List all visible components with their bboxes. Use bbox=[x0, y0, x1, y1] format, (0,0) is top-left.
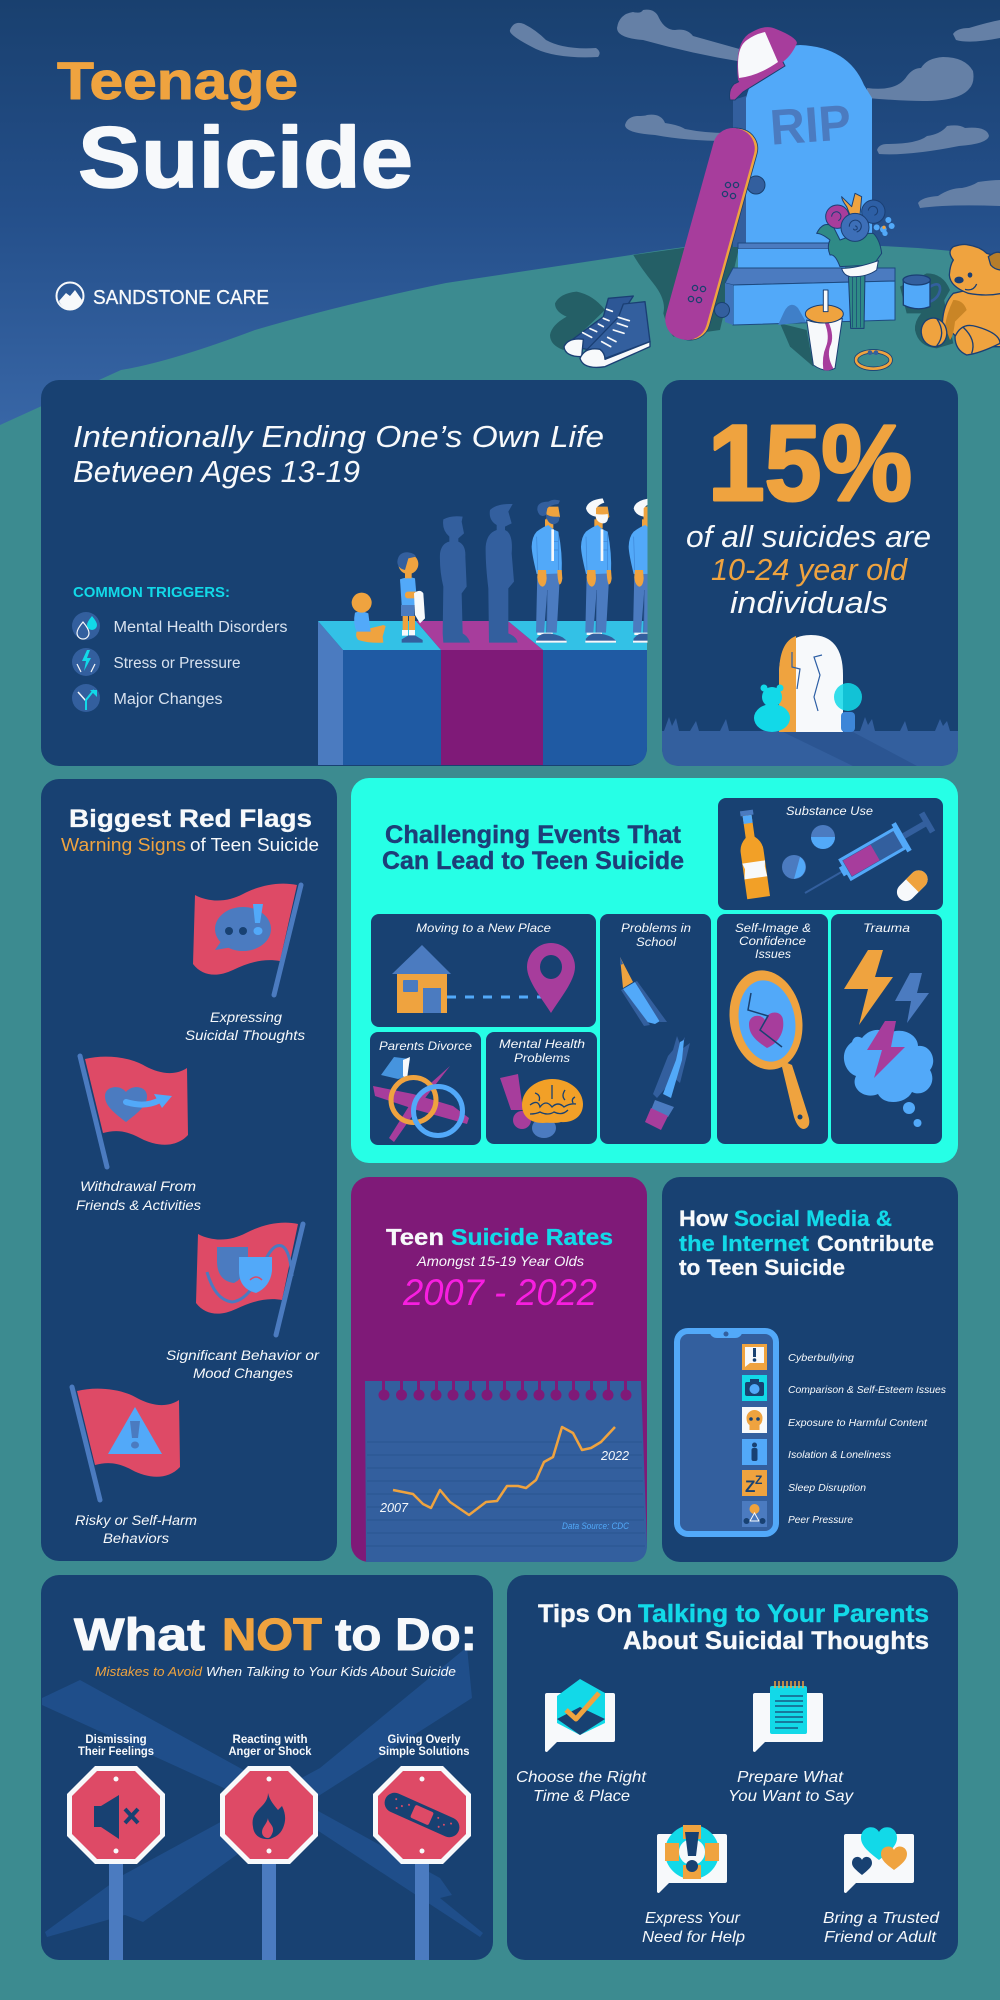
logo: Sandstone Care bbox=[56, 282, 269, 310]
figure: young adult silhouette bbox=[486, 504, 518, 643]
trigger: stress or pressure: Stress or Pressure bbox=[114, 655, 240, 672]
social item: cyberbullying bbox=[742, 1344, 854, 1370]
panel: tips for talking to parents bbox=[507, 1575, 958, 1960]
icon: syringe bbox=[797, 807, 938, 907]
social media heading: the Internet bbox=[679, 1231, 810, 1256]
social media heading: Contribute bbox=[817, 1231, 934, 1256]
social item: peer pressure: Peer Pressure bbox=[788, 1514, 853, 1526]
title bbox=[57, 52, 413, 206]
card: mental health problems: Problems bbox=[514, 1051, 570, 1065]
platform bbox=[318, 621, 647, 765]
card: self-image and confidence issues: Issues bbox=[755, 947, 791, 961]
sneakers bbox=[564, 296, 650, 367]
social item: sleep disruption: Sleep Disruption bbox=[788, 1482, 866, 1494]
panel: social media bbox=[662, 1177, 958, 1562]
social media heading: How bbox=[679, 1206, 729, 1231]
flag: withdrawal bbox=[76, 1056, 201, 1213]
icon: house bbox=[392, 945, 451, 1013]
panel: 15 percent stat bbox=[662, 380, 958, 766]
trigger: stress or pressure bbox=[72, 648, 240, 676]
panel: challenging events bbox=[351, 778, 958, 1163]
tip: bring a trusted friend bbox=[823, 1827, 940, 1946]
flag: behavior or mood changes: Significant Behavior or bbox=[166, 1347, 320, 1363]
social item: cyberbullying: Cyberbullying bbox=[788, 1352, 854, 1364]
card: problems in school: School bbox=[636, 935, 676, 949]
small grave illustration bbox=[662, 635, 958, 766]
social item: comparison bbox=[742, 1375, 947, 1401]
phone bbox=[677, 1331, 776, 1534]
trigger: mental health disorders bbox=[72, 612, 288, 640]
what not heading: What bbox=[74, 1609, 205, 1660]
sign: overly simple solutions: Giving Overly bbox=[388, 1734, 461, 1746]
clouds bbox=[510, 10, 1000, 208]
social item: peer pressure bbox=[742, 1501, 853, 1527]
icon: map pin bbox=[527, 943, 575, 1013]
social media heading: Social Media & bbox=[734, 1206, 892, 1231]
tips heading: Tips On bbox=[538, 1600, 632, 1628]
definition heading bbox=[73, 419, 604, 489]
tip: prepare what to say bbox=[728, 1681, 854, 1805]
icon: broken pencil bbox=[620, 957, 690, 1130]
stat text: individuals bbox=[730, 585, 888, 620]
mug bbox=[903, 275, 940, 309]
trigger: major changes: Major Changes bbox=[114, 691, 223, 708]
what not heading: to Do: bbox=[335, 1609, 477, 1660]
red flags heading: Biggest Red Flags bbox=[69, 805, 312, 833]
tip: express need for help: Express Your bbox=[645, 1910, 741, 1927]
stat text: 10-24 year old bbox=[711, 552, 909, 587]
what not subtitle: When Talking to Your Kids About Suicide bbox=[206, 1664, 456, 1679]
chart heading: Suicide Rates bbox=[451, 1224, 613, 1250]
notepad line chart: Data Source: CDC bbox=[562, 1521, 629, 1531]
teddy bear bbox=[918, 244, 1000, 355]
tip: bring a trusted friend: Bring a Trusted bbox=[823, 1910, 940, 1927]
social item: harmful content: Exposure to Harmful Content bbox=[788, 1417, 928, 1429]
what not heading: NOT bbox=[222, 1609, 322, 1660]
tip: bring a trusted friend: Friend or Adult bbox=[824, 1929, 937, 1946]
stat text: of all suicides are bbox=[686, 519, 931, 554]
tip: prepare what to say: Prepare What bbox=[737, 1769, 844, 1786]
illustration: memorial scene bbox=[550, 27, 1000, 371]
chart heading: Amongst 15-19 Year Olds bbox=[416, 1253, 584, 1269]
figure: baby bbox=[352, 593, 386, 643]
tip: express need for help bbox=[642, 1825, 745, 1946]
icon: bottle bbox=[735, 809, 770, 899]
big number: 15% bbox=[708, 402, 912, 523]
social item: comparison: Comparison & Self-Esteem Issues bbox=[788, 1384, 947, 1396]
ground shadows bbox=[550, 243, 953, 367]
bracelet bbox=[856, 350, 891, 369]
notepad line chart: 2022 bbox=[600, 1448, 630, 1463]
trigger: mental health disorders: Mental Health Disorders bbox=[114, 619, 288, 636]
chart heading bbox=[386, 1224, 613, 1313]
sign: reacting with anger: Reacting with bbox=[232, 1734, 308, 1746]
flag: risky or self-harm bbox=[72, 1387, 197, 1546]
card: problems in school: Problems in bbox=[621, 921, 691, 935]
tombstone bbox=[725, 45, 895, 325]
panel: definition bbox=[41, 380, 664, 766]
flag: behavior or mood changes: Mood Changes bbox=[193, 1365, 293, 1381]
flag: withdrawal: Withdrawal From bbox=[80, 1178, 196, 1194]
card: problems in school bbox=[600, 914, 711, 1144]
flag: risky or self-harm: Behaviors bbox=[103, 1530, 169, 1546]
figure: elderly man, cropped by panel bbox=[628, 498, 648, 643]
what not heading bbox=[74, 1609, 477, 1660]
icon: pills bbox=[782, 825, 931, 905]
stat text bbox=[686, 519, 931, 620]
social item: harmful content bbox=[742, 1407, 928, 1433]
tip: prepare what to say: You Want to Say bbox=[728, 1788, 854, 1805]
notepad line chart bbox=[365, 1380, 647, 1562]
card: moving to a new place bbox=[371, 914, 596, 1027]
figure: older man bbox=[581, 498, 616, 643]
skateboard bbox=[661, 123, 765, 345]
card: self-image and confidence issues: Self-Image & bbox=[735, 921, 811, 935]
cap bbox=[730, 27, 797, 100]
tombstone: RIP bbox=[768, 94, 853, 156]
card: substance use bbox=[718, 798, 943, 910]
tip: express need for help: Need for Help bbox=[642, 1929, 745, 1946]
title: Teenage bbox=[57, 52, 298, 111]
flag: risky or self-harm: Risky or Self-Harm bbox=[75, 1512, 197, 1528]
icon: thought cloud bbox=[844, 1021, 933, 1127]
challenging events heading: Can Lead to Teen Suicide bbox=[382, 847, 684, 875]
red flags heading bbox=[61, 805, 319, 855]
tips heading: About Suicidal Thoughts bbox=[623, 1627, 929, 1655]
card: self-image and confidence issues: Confidence bbox=[739, 934, 806, 948]
tip: right time and place: Choose the Right bbox=[516, 1769, 647, 1786]
logo: Sandstone Care: SANDSTONE CARE bbox=[93, 287, 269, 309]
sign: reacting with anger bbox=[220, 1734, 318, 1960]
flower bouquet bbox=[817, 193, 895, 328]
icon: cracked mirror bbox=[722, 965, 810, 1129]
flag: expressing suicidal thoughts: Expressing bbox=[210, 1009, 282, 1025]
flag: expressing suicidal thoughts bbox=[185, 884, 305, 1043]
definition heading: Between Ages 13-19 bbox=[73, 454, 360, 489]
social item: isolation: Isolation & Loneliness bbox=[788, 1449, 892, 1461]
sign: reacting with anger: Anger or Shock bbox=[228, 1746, 312, 1758]
social item: isolation bbox=[742, 1439, 892, 1465]
what not subtitle bbox=[95, 1664, 456, 1679]
chart heading: Teen bbox=[386, 1224, 444, 1250]
icon: broken rings bbox=[373, 1057, 469, 1142]
tips heading: Talking to Your Parents bbox=[638, 1600, 929, 1628]
challenging events heading bbox=[382, 821, 684, 875]
figure: child bbox=[397, 552, 425, 643]
figure: man with beard bbox=[532, 500, 567, 643]
flag: behavior or mood changes bbox=[166, 1223, 320, 1381]
title: Suicide bbox=[78, 110, 413, 206]
drink cup bbox=[805, 290, 843, 371]
red flags heading: of Teen Suicide bbox=[190, 835, 319, 855]
sign: dismissing feelings: Their Feelings bbox=[78, 1746, 154, 1758]
sign: dismissing feelings: Dismissing bbox=[85, 1734, 147, 1746]
tip: right time and place bbox=[516, 1679, 647, 1805]
sign: overly simple solutions: Simple Solutions bbox=[378, 1746, 470, 1758]
chart heading: 2007 - 2022 bbox=[402, 1272, 597, 1313]
common triggers heading: COMMON TRIGGERS: bbox=[73, 584, 230, 601]
notepad line chart: 2007 bbox=[379, 1500, 409, 1515]
flag: expressing suicidal thoughts: Suicidal Thoughts bbox=[185, 1027, 305, 1043]
challenging events heading: Challenging Events That bbox=[385, 821, 682, 849]
card: moving to a new place: Moving to a New Place bbox=[416, 921, 551, 935]
icon: lightning bolts bbox=[844, 950, 929, 1025]
card: self-image and confidence issues bbox=[717, 914, 828, 1144]
social item: sleep disruption bbox=[742, 1470, 866, 1496]
card: trauma bbox=[831, 914, 942, 1144]
tip: right time and place: Time & Place bbox=[533, 1788, 630, 1805]
sign: dismissing feelings bbox=[67, 1734, 165, 1960]
social media heading bbox=[679, 1206, 934, 1280]
card: parents divorce: Parents Divorce bbox=[379, 1039, 472, 1053]
panel: suicide rates chart bbox=[351, 1177, 647, 1562]
brushed X backdrop bbox=[42, 1647, 483, 1937]
sign: overly simple solutions bbox=[373, 1734, 471, 1960]
social item: sleep disruption: Z bbox=[745, 1477, 755, 1496]
icon: exclamation and brain bbox=[500, 1074, 583, 1138]
tips heading bbox=[538, 1600, 929, 1655]
card: parents divorce bbox=[370, 1032, 481, 1145]
card: mental health problems: Mental Health bbox=[499, 1037, 585, 1051]
panel: red flags bbox=[41, 779, 337, 1561]
panel: what not to do bbox=[41, 1575, 493, 1960]
red flags heading: Warning Signs bbox=[61, 835, 186, 855]
dashed route arrow bbox=[447, 996, 544, 998]
card: trauma: Trauma bbox=[863, 921, 910, 935]
flag: withdrawal: Friends & Activities bbox=[76, 1197, 201, 1213]
figure: teen silhouette bbox=[440, 516, 470, 643]
trigger: major changes bbox=[72, 684, 223, 712]
what not subtitle: Mistakes to Avoid bbox=[95, 1664, 203, 1679]
social media heading: to Teen Suicide bbox=[679, 1255, 845, 1280]
card: mental health problems bbox=[486, 1032, 597, 1144]
social item: sleep disruption: Z bbox=[755, 1473, 762, 1487]
hero sky and hill bbox=[0, 0, 1000, 425]
definition heading: Intentionally Ending One’s Own Life bbox=[73, 419, 604, 454]
card: substance use: Substance Use bbox=[786, 804, 873, 818]
